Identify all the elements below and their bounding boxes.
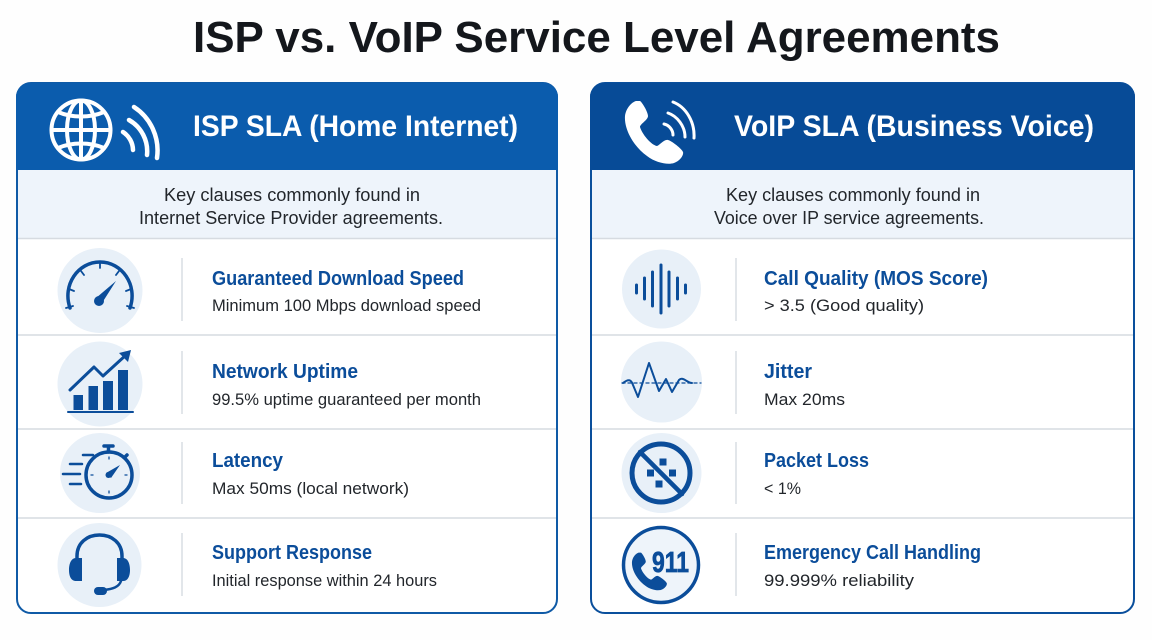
- panel: VoIP SLA: [590, 83, 1135, 613]
- row: Call Quality: > 3.5 (Good quality): [764, 296, 924, 315]
- panel: ISP SLA: [16, 83, 558, 613]
- icon: packet loss prohibited: [632, 444, 690, 502]
- icon: sound wave: [636, 265, 686, 313]
- intro band: Internet Service Provider agreements.: [139, 208, 443, 228]
- intro band: Voice over IP service agreements.: [714, 208, 984, 228]
- row: Jitter: Max 20ms: [764, 390, 845, 409]
- row: Jitter: [621, 342, 845, 422]
- intro band: Key clauses commonly found in: [726, 185, 980, 205]
- icon: phone: [625, 101, 683, 164]
- row: Emergency Call Handling: Emergency Call Handling: [764, 542, 981, 564]
- row: Latency: Max 50ms (local network): [212, 479, 409, 498]
- row: Packet Loss: Packet Loss: [764, 450, 869, 472]
- row: Guaranteed Download Speed: Guaranteed Download Speed: [212, 268, 464, 290]
- row: Guaranteed Download Speed: Minimum 100 Mbps download speed: [212, 296, 481, 315]
- icon: headset: [69, 535, 130, 595]
- row: Latency: [60, 433, 409, 513]
- intro band: [18, 170, 556, 238]
- row: Guaranteed Download Speed: [58, 248, 481, 333]
- icon: 911 phone: [624, 528, 698, 602]
- row: Emergency Call Handling: [622, 526, 981, 604]
- row: Emergency Call Handling: 99.999% reliability: [764, 571, 915, 590]
- row: Network Uptime: 99.5% uptime guaranteed per month: [212, 390, 481, 409]
- icon: 911 phone: 911: [652, 547, 689, 579]
- intro band: Key clauses commonly found in: [164, 185, 420, 205]
- intro band: [592, 170, 1133, 238]
- row: Jitter: Jitter: [764, 361, 812, 383]
- icon: stopwatch: [63, 446, 132, 498]
- title: ISP vs. VoIP Service Level Agreements: [193, 13, 1000, 62]
- row: Latency: Latency: [212, 450, 284, 472]
- header title: VoIP SLA (Business Voice): [734, 110, 1094, 143]
- icon: jitter waveform: [622, 363, 701, 397]
- row: Support Response: Support Response: [212, 542, 372, 564]
- row: Network Uptime: Network Uptime: [212, 361, 358, 383]
- panel header: VoIP SLA: [590, 83, 1135, 170]
- row: Call Quality: Call Quality (MOS Score): [764, 268, 988, 290]
- header title: ISP SLA (Home Internet): [193, 110, 518, 143]
- icon: wifi signal: [123, 107, 158, 158]
- row: Packet Loss: [622, 433, 869, 513]
- row: Support Response: [58, 523, 437, 607]
- row: Call Quality: [622, 250, 988, 328]
- row: Packet Loss: < 1%: [764, 479, 801, 498]
- row: Network Uptime: [58, 342, 481, 426]
- panel header: ISP SLA: [16, 83, 558, 170]
- row: Support Response: Initial response within 24 hours: [212, 571, 437, 590]
- icon: globe: [52, 100, 110, 160]
- icon: growth chart: [68, 350, 133, 412]
- icon: phone signal: [664, 102, 694, 138]
- icon: speedometer: [66, 262, 134, 308]
